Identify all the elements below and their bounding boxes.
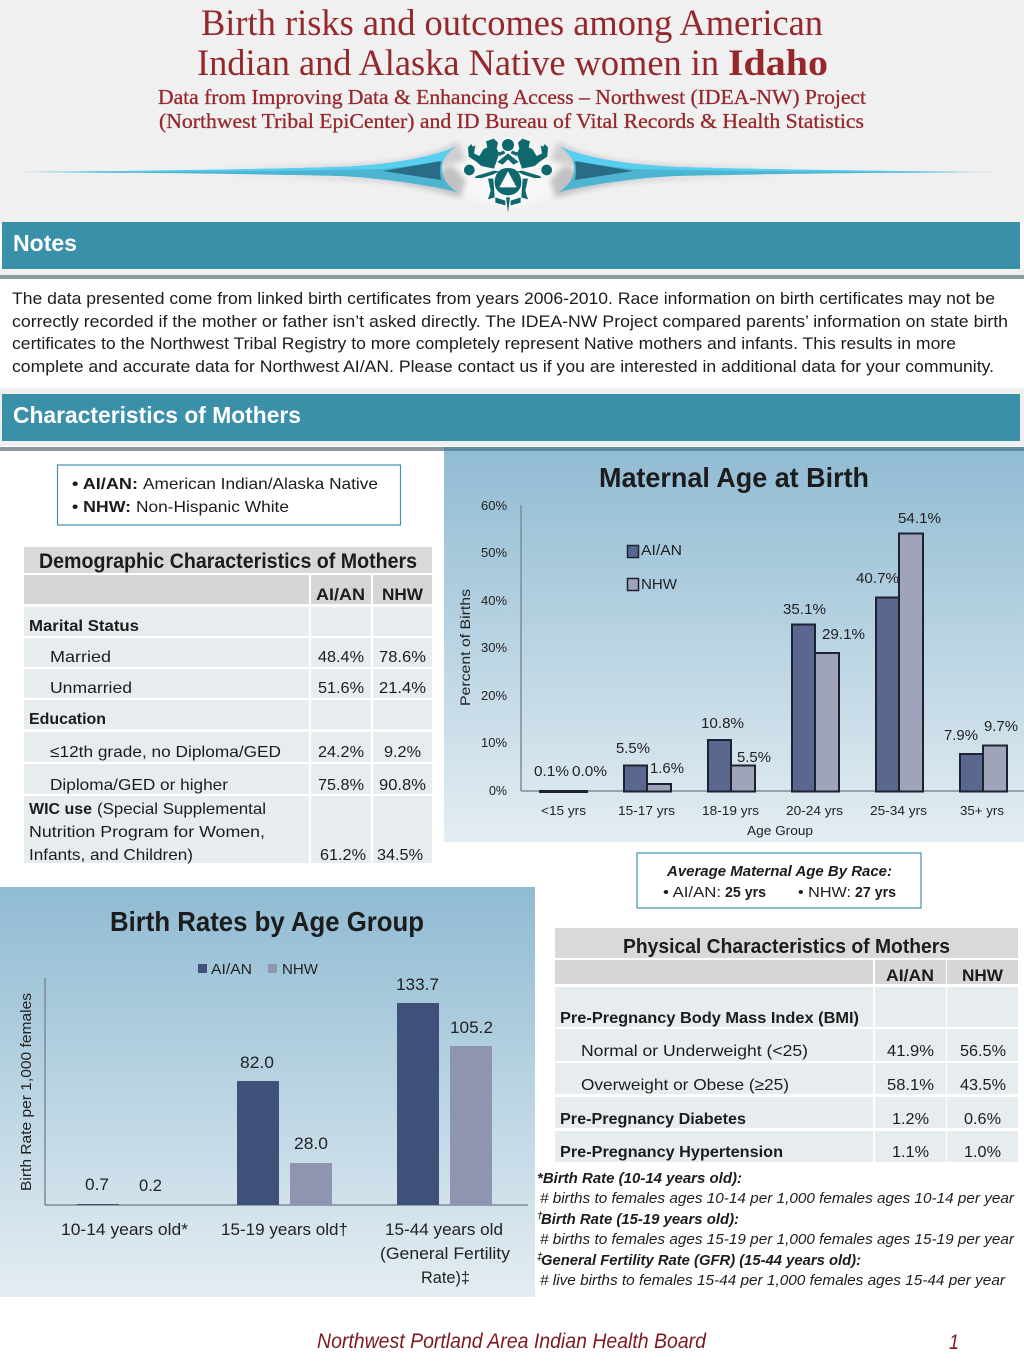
table: Demographic Characteristics of Mothers: 48.4% <box>318 649 364 666</box>
table: Demographic Characteristics of Mothers: 61.2% <box>320 847 366 864</box>
category labels: Age Group <box>747 823 813 838</box>
y axis title: Birth Rate per 1,000 females <box>18 993 35 1191</box>
table: Demographic Characteristics of Mothers: 75.8% <box>318 777 364 794</box>
Notes section band <box>0 222 1024 275</box>
category labels: 15-19 years old† <box>221 1221 348 1239</box>
table: Physical Characteristics of Mothers: 0.6% <box>964 1111 1001 1128</box>
legend definitions box <box>58 465 400 525</box>
category labels: Rate)‡ <box>421 1269 470 1287</box>
category labels: 15-44 years old <box>385 1221 503 1239</box>
title: Indian and Alaska Native women in <box>197 42 719 83</box>
table: Demographic Characteristics of Mothers: Nutrition Program for Women, <box>29 824 265 841</box>
callout: Average Maternal Age By Race: • NHW: <box>798 885 851 901</box>
table: Physical Characteristics of Mothers: AI/AN <box>886 966 934 985</box>
chart legend: AI/AN <box>641 543 682 559</box>
category labels: 25-34 yrs <box>870 803 928 818</box>
y axis labels <box>481 498 507 798</box>
footer: 1 <box>949 1331 959 1354</box>
footnotes: # births to females ages 10-14 per 1,000 females ages 10-14 per year <box>540 1191 1015 1207</box>
table: Demographic Characteristics of Mothers: 21.4% <box>379 680 426 697</box>
table: Physical Characteristics of Mothers: 56.5% <box>960 1043 1006 1060</box>
table: Demographic Characteristics of Mothers <box>24 547 432 864</box>
table: Physical Characteristics of Mothers: Pre-Pregnancy Body Mass Index (BMI) <box>560 1010 859 1027</box>
data labels: 0.7 <box>85 1175 109 1194</box>
table: Physical Characteristics of Mothers: 43.5% <box>960 1077 1006 1094</box>
table: Demographic Characteristics of Mothers: 34.5% <box>377 847 423 864</box>
table: Physical Characteristics of Mothers: 1.1% <box>892 1144 929 1161</box>
table: Physical Characteristics of Mothers <box>555 928 1018 1162</box>
callout: Average Maternal Age By Race: Average Maternal Age By Race: <box>666 864 892 880</box>
chart legend <box>628 543 682 593</box>
table: Demographic Characteristics of Mothers: Demographic Characteristics of Mothers <box>39 550 417 573</box>
subtitle: (Northwest Tribal EpiCenter) and ID Bureau of Vital Records & Health Statistics <box>159 109 864 133</box>
table: Demographic Characteristics of Mothers: (Special Supplemental <box>97 801 266 818</box>
footnotes: ‡ <box>537 1252 543 1263</box>
y axis labels: 20% <box>481 688 507 703</box>
title <box>197 2 828 83</box>
table: Demographic Characteristics of Mothers: 78.6% <box>379 649 426 666</box>
table: Demographic Characteristics of Mothers: 90.8% <box>379 777 426 794</box>
chart title: Birth Rates by Age Group <box>110 906 424 937</box>
category labels <box>541 803 1005 838</box>
Characteristics of Mothers band <box>0 388 1024 446</box>
table: Demographic Characteristics of Mothers: Infants, and Children) <box>29 847 193 864</box>
data labels: 5.5% <box>616 741 650 757</box>
category labels <box>61 1221 511 1287</box>
category labels: <15 yrs <box>541 803 587 818</box>
notes text: certificates to the Northwest Tribal Registry to more completely represent Native mothers and infants. This results in more <box>12 335 956 353</box>
chart title: Maternal Age at Birth <box>599 462 869 493</box>
header background <box>0 0 1024 222</box>
data labels: 40.7% <box>856 571 899 587</box>
notes text: The data presented come from linked birth certificates from years 2006-2010. Race information on birth certificates may not be <box>12 290 995 308</box>
footnotes: General Fertility Rate (GFR) (15-44 years old): <box>541 1253 861 1269</box>
table: Demographic Characteristics of Mothers: Unmarried <box>50 680 132 697</box>
legend definitions box: • AI/AN: <box>72 476 138 493</box>
notes text <box>12 290 1008 376</box>
footnotes: *Birth Rate (10-14 years old): <box>537 1171 742 1187</box>
footnotes <box>537 1171 1015 1289</box>
data labels: 54.1% <box>898 511 941 527</box>
legend definitions box: • NHW: <box>72 499 131 516</box>
table: Physical Characteristics of Mothers: Normal or Underweight (<25) <box>581 1043 808 1060</box>
legend definitions box: Non-Hispanic White <box>136 499 289 516</box>
data labels: 82.0 <box>240 1053 274 1072</box>
table: Physical Characteristics of Mothers: Pre-Pregnancy Hypertension <box>560 1144 783 1161</box>
y axis labels: 50% <box>481 545 507 560</box>
table: Demographic Characteristics of Mothers: Married <box>50 649 111 666</box>
data labels: 0.0% <box>572 764 607 780</box>
category labels: 35+ yrs <box>960 803 1005 818</box>
bars <box>77 1003 492 1205</box>
chart legend: AI/AN <box>211 961 252 978</box>
data labels: 29.1% <box>822 627 865 643</box>
category labels: 18-19 yrs <box>702 803 760 818</box>
y axis labels: 30% <box>481 640 507 655</box>
footer <box>317 1330 959 1354</box>
table: Demographic Characteristics of Mothers: ≤12th grade, no Diploma/GED <box>50 744 281 761</box>
data labels <box>534 511 1018 780</box>
callout: Average Maternal Age By Race: • AI/AN: <box>663 885 721 901</box>
notes text: complete and accurate data for Northwest AI/AN. Please contact us if you are interested in additional data for your community. <box>12 358 994 376</box>
data labels: 5.5% <box>737 750 771 766</box>
y axis title: Percent of Births <box>457 589 473 706</box>
footnotes: Birth Rate (15-19 years old): <box>541 1212 739 1228</box>
table: Demographic Characteristics of Mothers: 9.2% <box>384 744 421 761</box>
table: Demographic Characteristics of Mothers: AI/AN <box>316 585 365 604</box>
chart legend: NHW <box>641 577 677 593</box>
bars <box>540 534 1007 792</box>
table: Physical Characteristics of Mothers: 1.0% <box>964 1144 1001 1161</box>
table: Physical Characteristics of Mothers: 41.9% <box>887 1043 934 1060</box>
data labels: 7.9% <box>944 728 978 744</box>
data labels: 133.7 <box>396 975 439 994</box>
data labels: 35.1% <box>783 602 826 618</box>
title: Idaho <box>728 42 828 83</box>
data labels <box>85 975 493 1195</box>
data labels: 28.0 <box>294 1134 328 1153</box>
data labels: 0.2 <box>139 1176 162 1195</box>
icon: tribal emblem <box>464 139 552 213</box>
table: Physical Characteristics of Mothers: Pre-Pregnancy Diabetes <box>560 1111 746 1128</box>
panel: Maternal Age at Birth chart <box>444 447 1024 842</box>
table: Physical Characteristics of Mothers: NHW <box>962 966 1004 985</box>
Notes section band: Notes <box>13 230 77 256</box>
data labels: 10.8% <box>701 716 744 732</box>
table: Demographic Characteristics of Mothers: 51.6% <box>318 680 364 697</box>
table: Demographic Characteristics of Mothers: 24.2% <box>318 744 364 761</box>
category labels: (General Fertility <box>380 1245 511 1263</box>
data labels: 0.1% <box>534 764 569 780</box>
y axis labels: 10% <box>481 735 507 750</box>
table: Physical Characteristics of Mothers: Physical Characteristics of Mothers <box>623 935 950 958</box>
table: Demographic Characteristics of Mothers: Diploma/GED or higher <box>50 777 229 794</box>
table: Physical Characteristics of Mothers: 1.2% <box>892 1111 929 1128</box>
title: Birth risks and outcomes among American <box>201 2 823 43</box>
y axis labels: 0% <box>489 783 507 798</box>
category labels: 15-17 yrs <box>618 803 676 818</box>
subtitle: Data from Improving Data & Enhancing Access – Northwest (IDEA-NW) Project <box>158 85 866 109</box>
notes text: correctly recorded if the mother or father isn’t asked directly. The IDEA-NW Project compared parents’ information on state birth <box>12 313 1008 331</box>
footnotes: # live births to females 15-44 per 1,000 females ages 15-44 per year <box>540 1273 1006 1289</box>
Characteristics of Mothers band: Characteristics of Mothers <box>13 402 301 428</box>
footnotes: # births to females ages 15-19 per 1,000 females ages 15-19 per year <box>540 1232 1015 1248</box>
table: Physical Characteristics of Mothers: Overweight or Obese (≥25) <box>581 1077 789 1094</box>
chart legend <box>198 961 319 978</box>
table: Demographic Characteristics of Mothers: NHW <box>382 585 424 604</box>
subtitle <box>158 85 866 133</box>
data labels: 1.6% <box>650 761 684 777</box>
table: Demographic Characteristics of Mothers: Education <box>29 711 106 728</box>
legend definitions box: American Indian/Alaska Native <box>143 476 378 493</box>
chart legend: NHW <box>282 961 319 978</box>
category labels: 20-24 yrs <box>786 803 844 818</box>
data labels: 9.7% <box>984 719 1018 735</box>
category labels: 10-14 years old* <box>61 1221 189 1239</box>
table: Physical Characteristics of Mothers: 58.1% <box>887 1077 934 1094</box>
footnotes: † <box>537 1211 543 1222</box>
table: Demographic Characteristics of Mothers: WIC use <box>29 801 92 818</box>
data labels: 105.2 <box>450 1018 493 1037</box>
callout: Average Maternal Age By Race: 25 yrs <box>725 885 766 901</box>
y axis labels: 40% <box>481 593 507 608</box>
callout: Average Maternal Age By Race <box>637 853 921 908</box>
y axis labels: 60% <box>481 498 507 513</box>
decorative swoosh divider <box>14 135 1002 211</box>
table: Demographic Characteristics of Mothers: Marital Status <box>29 618 139 635</box>
callout: Average Maternal Age By Race: 27 yrs <box>855 885 896 901</box>
panel: Birth Rates by Age Group chart <box>0 887 535 1297</box>
footer: Northwest Portland Area Indian Health Board <box>317 1330 707 1353</box>
